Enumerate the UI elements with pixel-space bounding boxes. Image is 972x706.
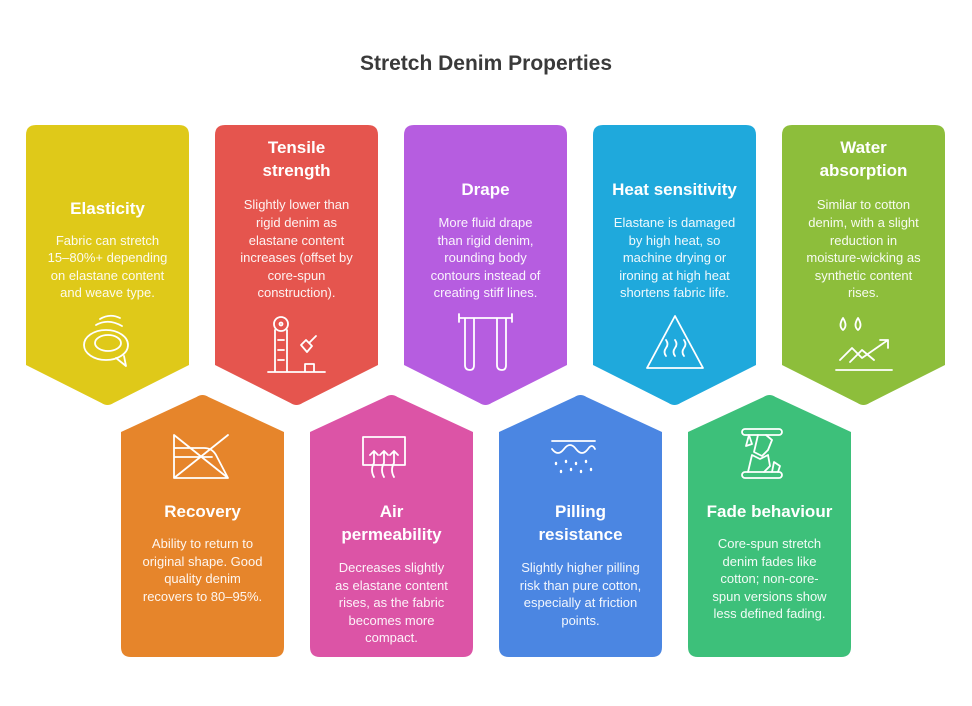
panel: tensile strength: elastane content [249,233,345,248]
panel: water absorption [782,125,945,405]
panel: recovery: Ability to return to [152,536,253,551]
panel: air permeability: Decreases slightly [339,560,445,575]
panel: fade behaviour: spun versions show [712,589,827,604]
icon: no iron [174,435,228,478]
panel: air permeability [310,395,473,657]
panel: drape: rounding body [444,250,527,265]
panel: water absorption: synthetic content [815,268,913,283]
panel: tensile strength: rigid denim as [256,215,337,230]
panel: recovery [121,395,284,657]
panel: water absorption: rises. [848,285,879,300]
panel: fade behaviour: Fade behaviour [707,502,833,521]
panel: fade behaviour [688,395,851,657]
panel: recovery: quality denim [164,571,241,586]
panel: drape: contours instead of [431,268,541,283]
panel: water absorption: moisture-wicking as [806,250,921,265]
panel: fade behaviour: less defined fading. [713,606,826,621]
panel: tensile strength: strength [262,161,330,180]
panel: water absorption: Similar to cotton [817,197,910,212]
panel: pilling resistance: resistance [538,525,623,544]
panel: pilling resistance [499,395,662,657]
panel: air permeability: as elastane content [335,578,448,593]
icon: droplets and trend [836,318,892,370]
panel: heat sensitivity: shortens fabric life. [620,285,729,300]
icon: airflow [363,437,405,477]
panel: tensile strength [215,125,378,405]
panel: tensile strength: increases (offset by [240,250,353,265]
panel: pilling resistance: Pilling [555,502,606,521]
panel: air permeability: permeability [341,525,442,544]
title: Stretch Denim Properties [360,52,612,75]
panel: heat sensitivity: by high heat, so [629,233,720,248]
panel: water absorption: absorption [820,161,907,180]
panel: tensile strength: construction). [257,285,336,300]
panel: drape [404,125,567,405]
panel: pilling resistance: points. [561,613,600,628]
panel: heat sensitivity [593,125,756,405]
panel: elasticity: and weave type. [60,285,155,300]
panel: water absorption: reduction in [830,233,897,248]
panel: air permeability: Air [380,502,404,521]
panel: water absorption: Water [840,138,887,157]
icon: elastic coil [84,316,128,366]
panel: fade behaviour: cotton; non-core- [720,571,819,586]
panel: tensile strength: Slightly lower than [244,197,349,212]
panel: drape: than rigid denim, [437,233,534,248]
panel: pilling resistance: risk than pure cotton, [520,578,641,593]
panel: drape: creating stiff lines. [434,285,537,300]
panel: tensile strength: core-spun [268,268,325,283]
panel: heat sensitivity: Elastane is damaged [614,215,735,230]
panel: air permeability: compact. [365,630,418,645]
icon: heat warning [647,316,703,368]
panel: air permeability: rises, as the fabric [339,595,445,610]
panel: elasticity: Elasticity [70,199,145,218]
panel: fade behaviour: Core-spun stretch [718,536,821,551]
panel: heat sensitivity: Heat sensitivity [612,180,737,199]
panel: drape: More fluid drape [439,215,532,230]
panel: water absorption: denim, with a slight [808,215,919,230]
panel: drape: Drape [461,180,510,199]
icon: hanging fabric [459,314,512,370]
panel: recovery: Recovery [164,502,241,521]
panel: recovery: recovers to 80–95%. [143,589,262,604]
panel: recovery: original shape. Good [143,554,262,569]
panel: fade behaviour: denim fades like [723,554,816,569]
panel: pilling resistance: especially at friction [524,595,637,610]
panel: elasticity: 15–80%+ depending [48,250,167,265]
icon: fading garments [742,429,782,478]
panel: heat sensitivity: ironing at high heat [619,268,730,283]
panel: elasticity: Fabric can stretch [56,233,159,248]
panel: air permeability: becomes more [349,613,434,628]
icon: strength tester [268,317,325,372]
panel: tensile strength: Tensile [268,138,325,157]
panel: heat sensitivity: machine drying or [623,250,727,265]
panel: elasticity: on elastane content [51,268,165,283]
panel: elasticity [26,125,189,405]
panel: pilling resistance: Slightly higher pilling [521,560,640,575]
icon: fabric pilling [552,441,595,472]
